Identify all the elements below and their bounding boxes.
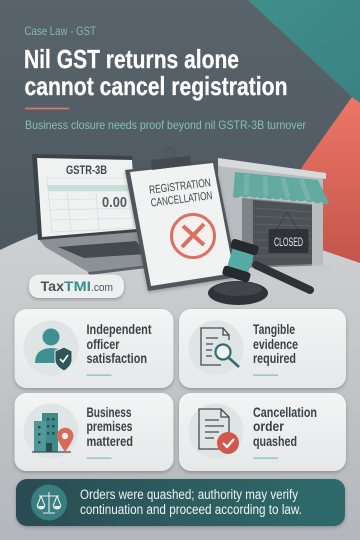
panel: cancellation order quashed bbox=[179, 393, 346, 471]
eyebrow: Case Law - GST bbox=[24, 24, 97, 38]
panel: conclusion banner bbox=[16, 479, 345, 526]
card rule bbox=[253, 458, 278, 459]
laptop screen heading: GSTR-3B bbox=[66, 165, 107, 177]
title: cannot cancel registration bbox=[24, 71, 288, 101]
illustration: gavel bbox=[208, 238, 310, 305]
card text: order bbox=[253, 419, 285, 434]
icon: building with map pin bbox=[24, 404, 78, 458]
conclusion text: Orders were quashed; authority may verify bbox=[80, 487, 298, 502]
logo pill bbox=[29, 274, 124, 298]
card text: Business bbox=[86, 405, 132, 420]
title: Nil GST returns alone bbox=[24, 44, 239, 74]
card text: Independent bbox=[86, 322, 152, 337]
card text: mattered bbox=[86, 434, 133, 449]
card text: required bbox=[253, 351, 296, 366]
card rule bbox=[86, 374, 112, 376]
card rule bbox=[253, 374, 278, 376]
card text: quashed bbox=[253, 434, 297, 449]
icon: officer with shield bbox=[24, 320, 78, 376]
logo pill: TMI bbox=[64, 279, 91, 294]
rejected mark bbox=[172, 214, 214, 258]
card text: premises bbox=[86, 419, 132, 434]
card text: officer bbox=[86, 337, 120, 352]
conclusion text: continuation and proceed according to law. bbox=[80, 502, 302, 517]
floor bbox=[0, 231, 360, 540]
panel: business premises mattered bbox=[14, 393, 174, 471]
illustration: storefront bbox=[218, 158, 332, 276]
illustration: clipboard bbox=[125, 148, 238, 291]
clipboard text: REGISTRATION bbox=[149, 177, 212, 197]
icon: scales of justice bbox=[31, 484, 67, 520]
illustration: laptop bbox=[32, 154, 147, 275]
subtitle: Business closure needs proof beyond nil GSTR-3B turnover bbox=[25, 118, 306, 132]
card text: satisfaction bbox=[86, 351, 147, 366]
card rule bbox=[86, 458, 112, 459]
clipboard text: CANCELLATION bbox=[150, 190, 213, 210]
accent rule bbox=[25, 108, 69, 109]
card text: evidence bbox=[253, 337, 298, 352]
logo pill: Tax bbox=[40, 279, 65, 294]
closed sign: CLOSED bbox=[274, 235, 303, 249]
teal corner shape bbox=[248, 0, 360, 103]
nil value: 0.00 bbox=[102, 195, 127, 211]
awning bbox=[233, 172, 329, 204]
coral corner shape bbox=[290, 97, 360, 266]
panel: independent officer satisfaction bbox=[14, 309, 174, 388]
panel: tangible evidence required bbox=[179, 309, 346, 388]
clip bbox=[151, 148, 191, 170]
logo pill: .com bbox=[91, 282, 113, 294]
icon: document with check badge bbox=[188, 404, 244, 458]
clipboard text bbox=[149, 177, 213, 210]
card text: Cancellation bbox=[253, 405, 317, 420]
icon: document with magnifier bbox=[188, 320, 244, 376]
header bbox=[24, 24, 306, 132]
card text: Tangible bbox=[253, 322, 295, 337]
